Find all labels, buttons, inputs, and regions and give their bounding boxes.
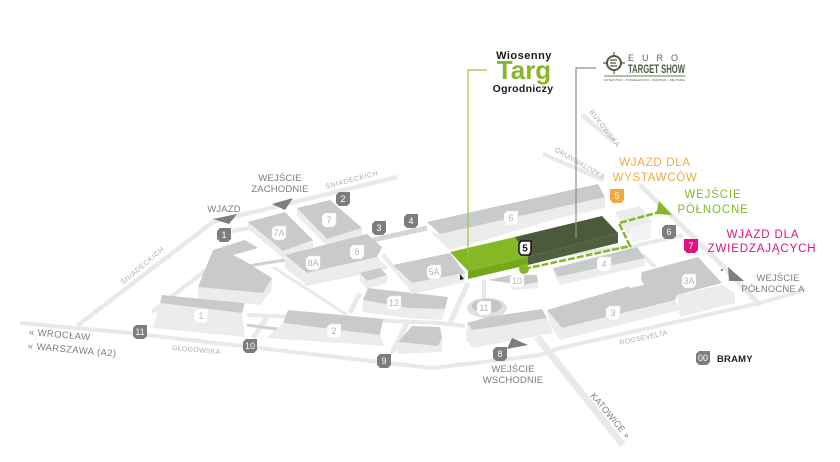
building number labels: 4 xyxy=(601,259,607,269)
building 4 xyxy=(553,247,645,285)
street names: KATOWICE » xyxy=(588,391,632,440)
blue dot marker xyxy=(721,269,723,271)
green dashed route xyxy=(519,201,672,274)
building number labels xyxy=(194,211,696,338)
logo: Euro Target Show: TARGET SHOW xyxy=(628,62,685,76)
label: wjazd dla zwiedzających: WJAZD DLA xyxy=(727,229,799,241)
building 5A xyxy=(393,253,465,294)
building 10 xyxy=(488,275,538,290)
gate arrow: north A xyxy=(728,267,744,281)
building number labels: 3A xyxy=(683,276,695,286)
label: wejście wschodnie: WEJŚCIE xyxy=(491,363,535,375)
label: wejście północne: PÓŁNOCNE xyxy=(677,203,749,216)
label: wjazd dla wystawców: WJAZD DLA xyxy=(619,157,691,169)
street names: ROOSEVELTA xyxy=(619,330,668,347)
gate badges: 7 xyxy=(688,241,694,251)
building south of 12 xyxy=(397,326,442,354)
gate arrow: west xyxy=(272,198,293,210)
label: wejście północne: WEJŚCIE xyxy=(684,188,742,201)
heading: Wiosenny Targ Ogrodniczy: Ogrodniczy xyxy=(493,83,553,95)
building number labels: 7 xyxy=(326,215,332,225)
label: wejście wschodnie xyxy=(483,363,543,386)
label: Wrocław and Warszawa xyxy=(27,327,117,360)
label: wejście wschodnie: WSCHODNIE xyxy=(483,375,543,386)
building number labels: 5A xyxy=(428,267,440,277)
heading: Wiosenny Targ Ogrodniczy: Targ xyxy=(497,55,551,85)
street names: GŁOGOWSKA xyxy=(172,345,221,356)
legend: bramy: BRAMY xyxy=(717,354,753,365)
gate badges: 8 xyxy=(497,349,503,359)
exhibition hall 5: Wiosenny Targ section xyxy=(450,237,528,279)
building 8 and 8A xyxy=(285,234,385,285)
gate badges: 10 xyxy=(245,341,255,351)
label: wejście północne xyxy=(677,188,749,216)
road network xyxy=(20,115,805,445)
gate badges xyxy=(133,189,698,368)
street names: ŚNIADECKICH xyxy=(324,168,379,191)
small buildings north east xyxy=(615,206,653,243)
logo: Euro Target Show: MYŚLISTWO • STRZELECTWO • SURVIVAL • MILITARIA xyxy=(604,77,685,82)
gate badges: 6 xyxy=(666,227,672,237)
label: wjazd dla zwiedzających xyxy=(708,229,816,255)
label: wejście północne A: WEJŚCIE xyxy=(756,272,800,284)
label: wjazd dla wystawców xyxy=(613,157,697,184)
building 6 xyxy=(427,184,605,250)
exhibition hall 5: Euro Target Show section xyxy=(515,216,618,265)
pavilion 11 xyxy=(467,298,507,318)
label: wejście północne A xyxy=(741,272,805,295)
legend: bramy: 00 xyxy=(698,353,708,363)
building number labels: 1 xyxy=(198,311,204,321)
gate badges: 3 xyxy=(376,223,382,233)
gate badges: 5 xyxy=(614,191,620,201)
building 3 and 3A xyxy=(547,257,735,340)
building 7A xyxy=(248,212,313,258)
building 2 xyxy=(267,310,384,346)
street names: GRUNWALDZKA xyxy=(553,147,606,181)
gate badges: 11 xyxy=(135,327,145,337)
gate badges: 1 xyxy=(221,230,227,240)
building number labels: 6 xyxy=(508,213,514,223)
building 8 entrance xyxy=(466,309,553,348)
building 1 xyxy=(153,295,245,337)
label: wejście północne A: PÓŁNOCNE A xyxy=(741,284,805,295)
hall number 5 badge: 5 xyxy=(522,244,528,254)
building number labels: 12 xyxy=(389,298,399,308)
hall number 5 badge xyxy=(519,241,531,255)
label: Wrocław and Warszawa: « WROCŁAW xyxy=(28,327,91,343)
gate arrow: east xyxy=(507,338,528,349)
building 12 xyxy=(362,288,448,320)
heading: Wiosenny Targ Ogrodniczy: Wiosenny xyxy=(496,50,552,62)
building 7 xyxy=(297,200,362,246)
building number labels: 3 xyxy=(610,308,616,318)
gate badges: 9 xyxy=(381,356,387,366)
leader line: Targ xyxy=(468,70,487,258)
building number labels: 2 xyxy=(331,326,337,336)
street names: ŚNIADECKICH xyxy=(119,245,166,287)
label: wejście zachodnie xyxy=(251,172,309,195)
legend: bramy xyxy=(696,351,753,365)
building number labels: 10 xyxy=(512,276,522,286)
label: Wrocław and Warszawa: « WARSZAWA (A2) xyxy=(27,341,117,360)
heading: Wiosenny Targ Ogrodniczy xyxy=(493,50,553,95)
small black entrance marker xyxy=(460,274,464,280)
logo: Euro Target Show: EURO xyxy=(628,53,686,63)
label: wejście zachodnie: ZACHODNIE xyxy=(251,184,309,195)
small building xyxy=(360,268,387,289)
building number labels: 7A xyxy=(273,228,285,238)
label: wjazd dla wystawców: WYSTAWCÓW xyxy=(613,171,697,184)
street names xyxy=(119,109,668,440)
logo: Euro Target Show xyxy=(603,52,686,82)
gate badges: 2 xyxy=(340,194,346,204)
label: wjazd dla zwiedzających: ZWIEDZAJĄCYCH xyxy=(708,243,816,255)
label: wjazd: WJAZD xyxy=(207,204,241,215)
building number labels: 8 xyxy=(354,247,360,257)
gate arrow: wjazd xyxy=(213,214,237,224)
street names: BUKOWSKA xyxy=(587,109,621,149)
label: wejście zachodnie: WEJŚCIE xyxy=(258,172,302,184)
leader line: Euro Target Show xyxy=(576,68,596,238)
building number labels: 8A xyxy=(307,258,319,268)
building number labels: 11 xyxy=(479,303,489,313)
main hall west xyxy=(198,240,272,305)
gate badges: 4 xyxy=(408,216,414,226)
